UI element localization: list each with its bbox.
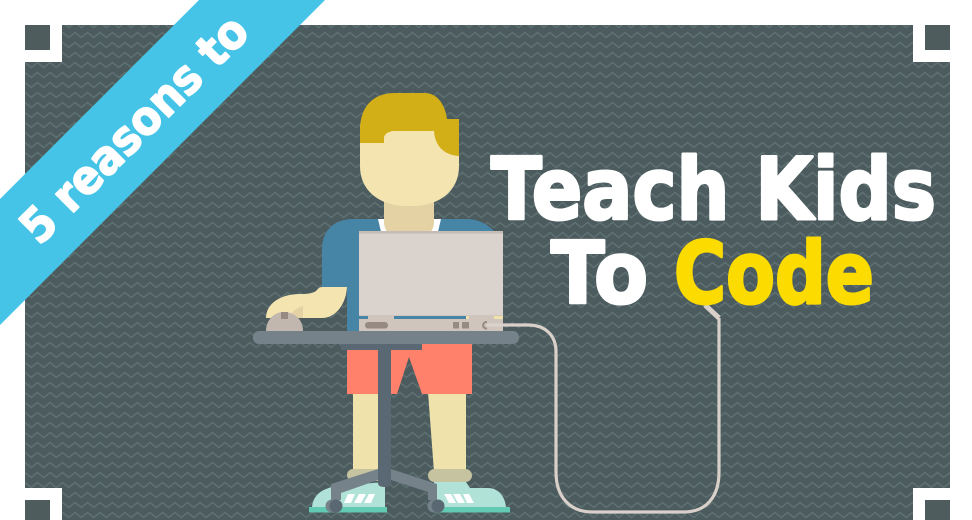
title [491,140,936,324]
neck [384,195,434,236]
right shoe [434,482,510,512]
shirt [322,219,500,331]
illustration: kid at laptop [253,93,519,512]
shorts [347,344,472,394]
legs [353,392,466,472]
cable [487,305,719,512]
diagonal banner [0,0,325,325]
table pole [378,346,391,487]
title line two: To [551,224,648,324]
table top [253,331,519,344]
casters [326,500,444,512]
highlighted word: Code [674,224,874,324]
laptop [359,231,503,331]
socks [347,469,472,482]
left shoe [309,482,387,512]
table base legs [331,469,437,500]
table bracket [341,344,422,350]
mouse [266,312,303,331]
collar [378,219,441,236]
hair [360,93,459,156]
hand [266,287,347,318]
head [360,125,459,206]
